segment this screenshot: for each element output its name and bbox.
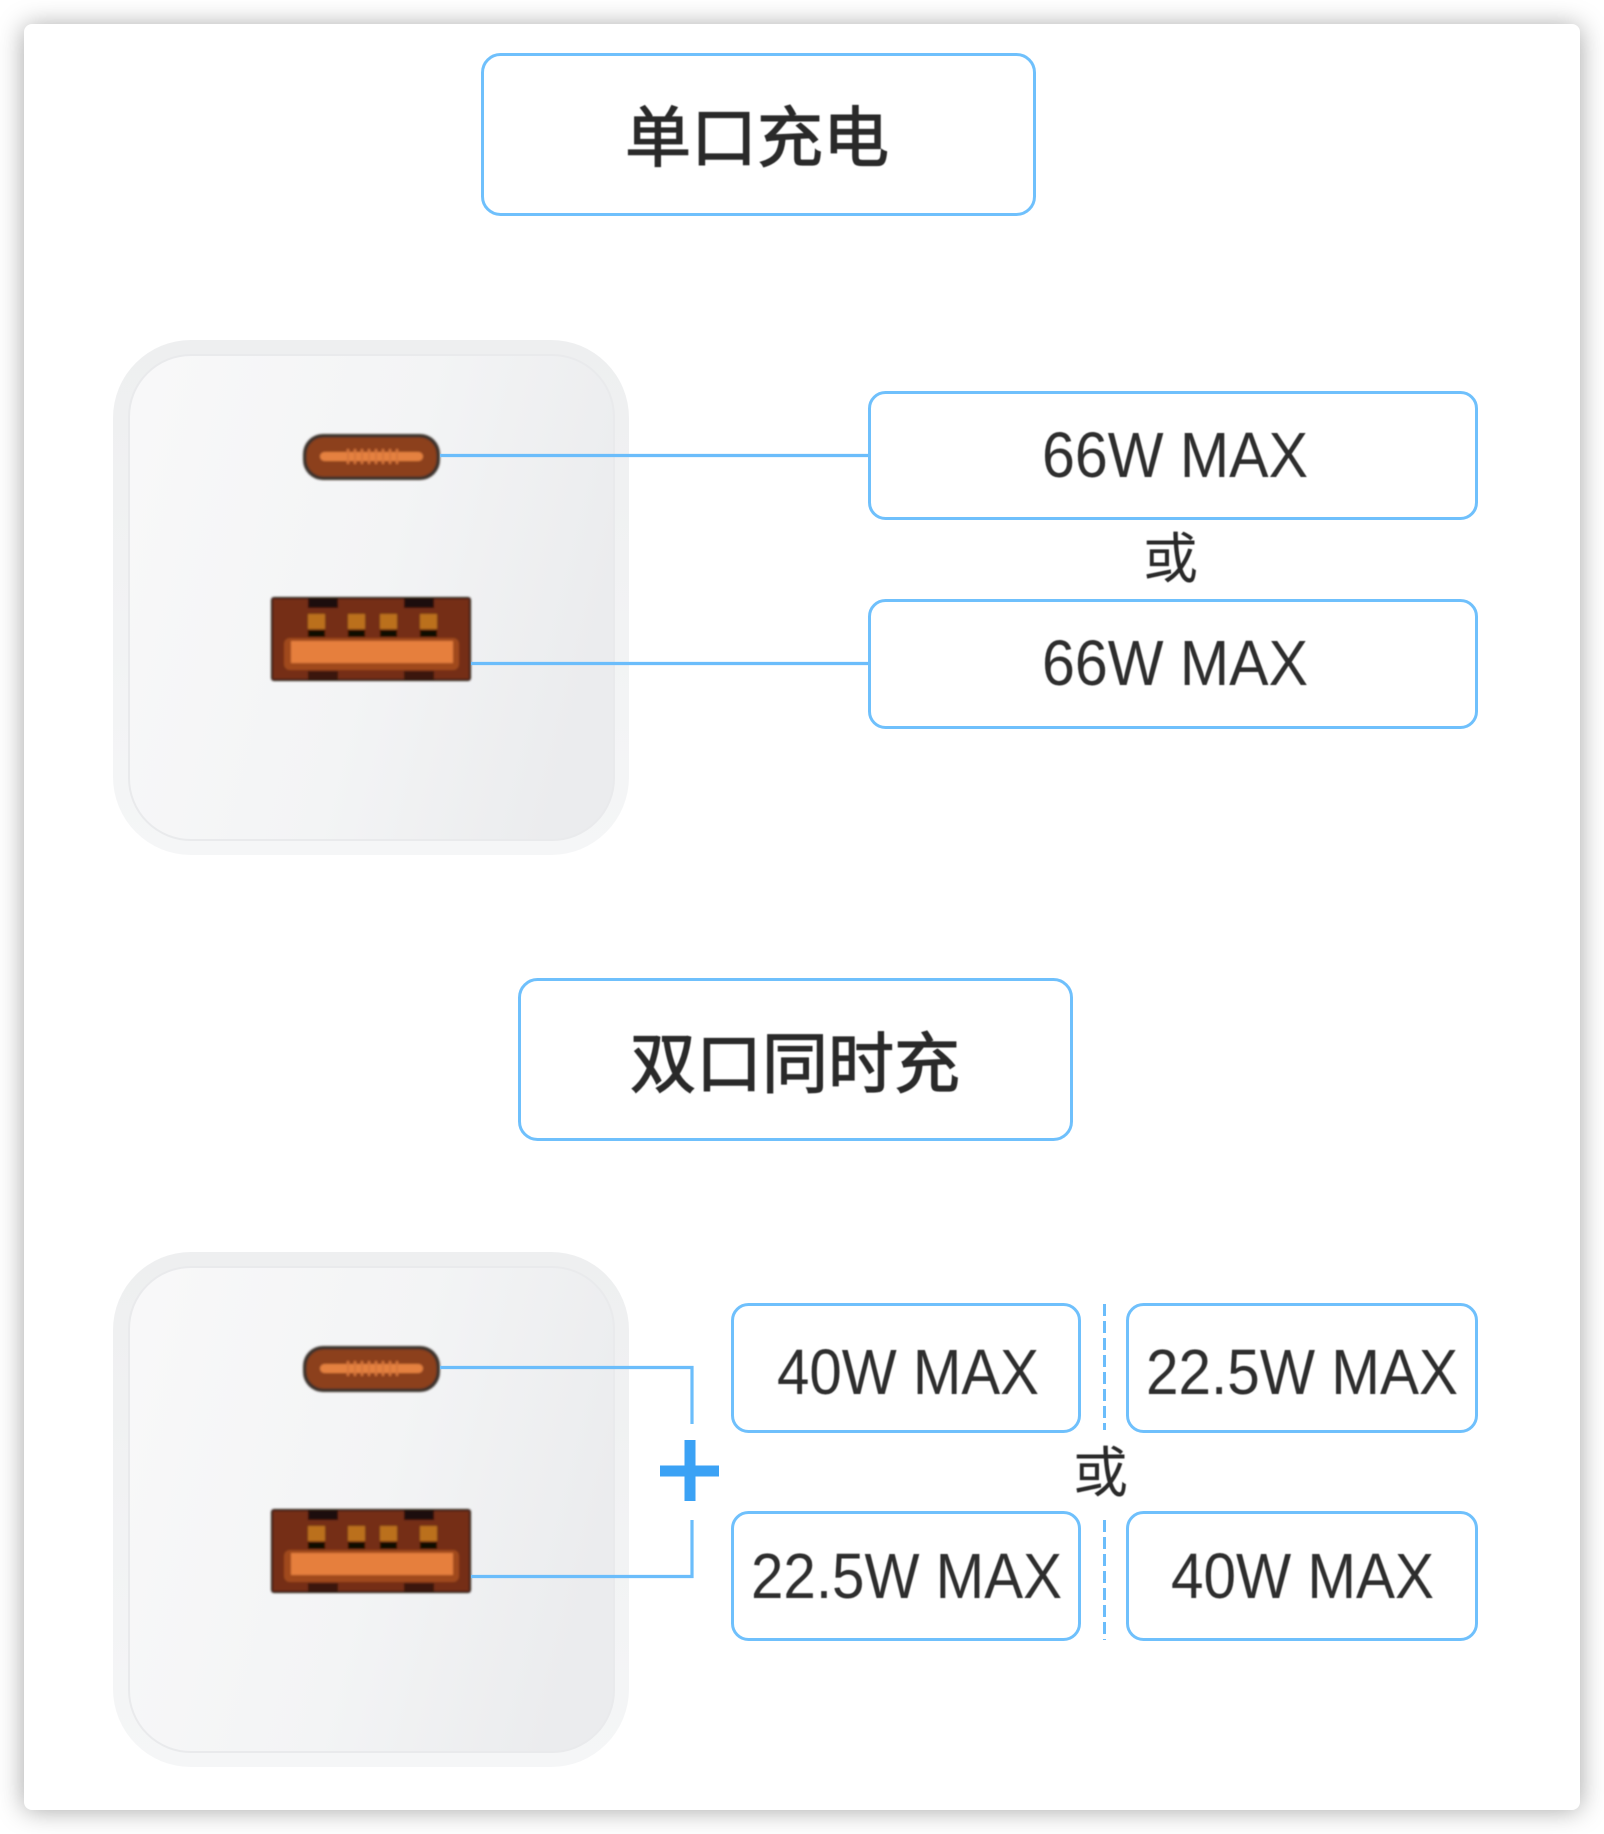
heading: single-port charging: [482, 54, 1034, 214]
power box: 40W MAX top left: [732, 1304, 1080, 1432]
power box: USB-A 66W MAX: [870, 600, 1476, 728]
power box: 22.5W MAX top right: 22.5W MAX: [1146, 1336, 1458, 1408]
power box: USB-C 66W MAX: [870, 392, 1476, 518]
power box: 40W MAX bottom right: 40W MAX: [1171, 1540, 1434, 1612]
connector line: USB-C to plus: [440, 1368, 692, 1424]
icon: USB-A port: [271, 1509, 471, 1593]
heading: dual-port charging: [520, 980, 1072, 1140]
heading: dual-port charging: 双口同时充: [630, 1027, 960, 1101]
power box: USB-A 66W MAX: 66W MAX: [1042, 627, 1308, 699]
icon: USB-C port: [303, 434, 440, 480]
icon: plus sign: [660, 1440, 719, 1501]
icon: USB-C port: [303, 1346, 440, 1392]
charger: single-port section: [113, 340, 629, 855]
charger: dual-port section: [113, 1252, 629, 1767]
power box: 40W MAX top left: 40W MAX: [777, 1336, 1039, 1408]
label: or: 或: [1143, 528, 1198, 590]
power box: 22.5W MAX top right: [1128, 1304, 1476, 1432]
connector line: USB-A to plus: [471, 1520, 692, 1576]
power box: 22.5W MAX bottom left: 22.5W MAX: [751, 1540, 1062, 1612]
heading: single-port charging: 单口充电: [625, 101, 889, 175]
icon: USB-A port: [271, 597, 471, 681]
power box: 22.5W MAX bottom left: [732, 1512, 1080, 1640]
connector line: USB-A to 66W: [471, 662, 869, 665]
power box: USB-C 66W MAX: 66W MAX: [1042, 419, 1308, 491]
label: or: 或: [1073, 1442, 1128, 1504]
power box: 40W MAX bottom right: [1128, 1512, 1476, 1640]
connector line: USB-C to 66W: [440, 454, 869, 457]
